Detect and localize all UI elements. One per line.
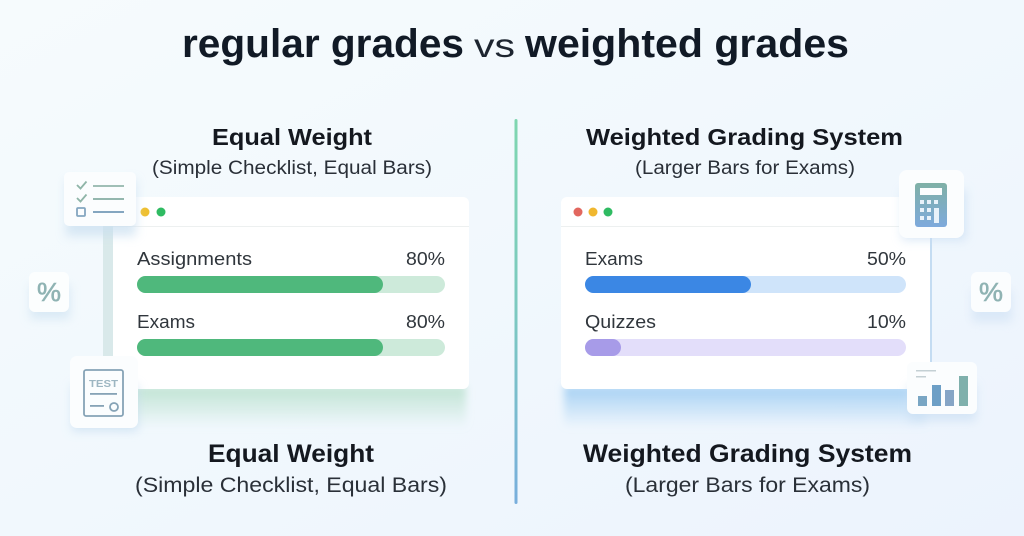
heading: equal weight bottom: Equal Weight [208,440,375,468]
heading: weighted bottom: Weighted Grading System [583,440,912,468]
title [182,22,849,66]
window shadow right [564,386,926,428]
heading: equal weight top [152,124,432,179]
icon: percent left [29,272,70,319]
panel: regular grades [103,124,469,497]
row: exams: 80% [406,311,445,332]
heading: weighted bottom [583,440,912,497]
title: weighted grades [524,22,849,66]
heading: weighted bottom: (Larger Bars for Exams) [625,474,870,497]
heading: weighted top: (Larger Bars for Exams) [635,158,855,179]
window dots [140,208,166,216]
row: exams: Exams [137,311,195,332]
icon: percent right [971,272,1012,322]
icon: checklist [64,172,136,236]
central divider [514,119,518,504]
heading: equal weight bottom: (Simple Checklist, Equal Bars) [135,474,447,497]
window shadow left [116,386,466,428]
icon: percent right: % [979,277,1003,307]
icon: test paper [70,356,138,431]
panel: weighted grades [561,124,932,497]
heading: equal weight top: Equal Weight [212,124,372,150]
row: quizzes 10%: Quizzes [585,311,656,332]
row: quizzes 10%: 10% [867,311,906,332]
connector line right [929,235,932,365]
row: exams 50% [585,248,906,293]
row: exams 50%: Exams [585,248,643,269]
row: assignments: 80% [406,248,445,269]
heading: equal weight top: (Simple Checklist, Equal Bars) [152,158,432,179]
heading: equal weight bottom [135,440,447,497]
row: quizzes 10% [585,311,906,356]
icon: test paper: TEST [89,379,118,390]
window dots [574,208,612,216]
title: vs [474,27,515,64]
icon: bar chart [907,362,977,421]
heading: weighted top [586,124,903,179]
heading: weighted top: Weighted Grading System [586,124,903,150]
window: weighted bars [561,197,930,389]
icon: percent left: % [37,277,61,307]
connector line left [103,225,113,370]
icon: calculator [899,170,966,240]
window: equal bars [113,197,469,389]
row: exams [137,311,445,356]
row: assignments: Assignments [137,248,252,269]
title: regular grades [182,22,464,66]
row: assignments [137,248,445,293]
row: exams 50%: 50% [867,248,906,269]
